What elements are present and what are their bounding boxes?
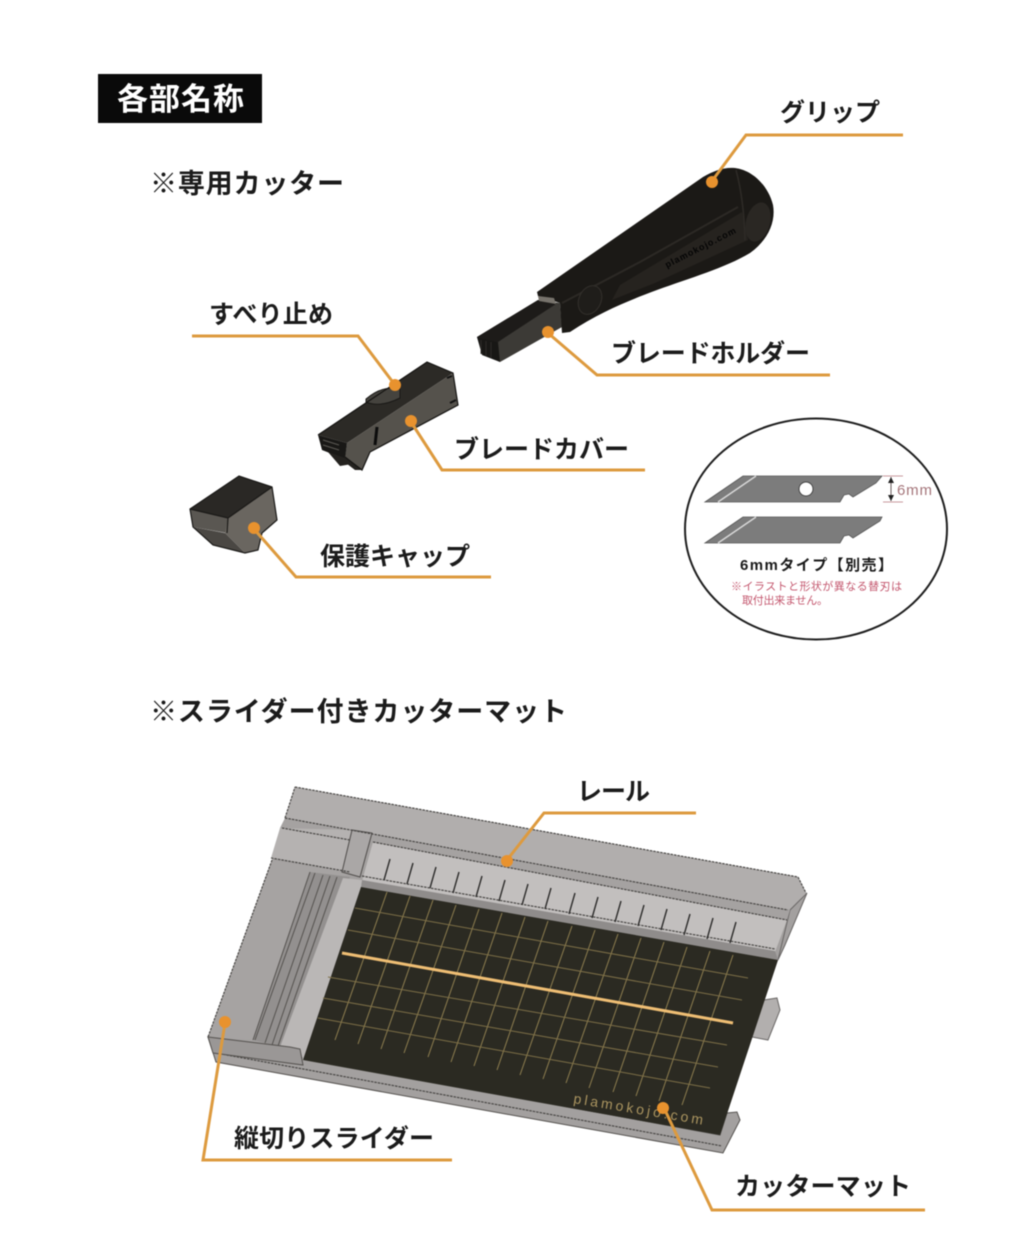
rail: right edge xyxy=(778,893,807,960)
title: parts names: 各部名称 xyxy=(117,82,244,117)
label: grip: グリップ xyxy=(780,98,880,127)
orange cutting guide line xyxy=(342,953,733,1023)
block at upper left xyxy=(271,828,352,873)
ruler strip xyxy=(362,842,787,952)
icon: upper blade xyxy=(705,476,882,502)
icon: knife handle and blade holder xyxy=(477,168,775,362)
groove band under rail xyxy=(280,818,790,920)
title: parts names xyxy=(98,74,262,123)
leader: vertical cut slider xyxy=(203,1016,452,1160)
leader: blade cover xyxy=(405,415,645,470)
panel: replacement blade callout xyxy=(685,418,947,640)
label: protective cap: 保護キャップ xyxy=(320,543,470,571)
icon: blade cover xyxy=(318,362,458,470)
label: blade cover: ブレードカバー xyxy=(454,435,629,464)
heading: cutter mat with slider: ※スライダー付きカッターマット xyxy=(150,696,567,727)
label: vertical cut slider: 縦切りスライダー xyxy=(234,1124,434,1153)
slider grooves xyxy=(253,872,350,1047)
icon: protective cap xyxy=(190,476,277,553)
leader: protective cap xyxy=(248,522,491,577)
leader: blade holder xyxy=(542,326,830,375)
label: 6mm type sold separately: 6mmタイプ【別売】 xyxy=(740,557,893,574)
rail: top face xyxy=(285,787,806,910)
label: cutter mat: カッターマット xyxy=(735,1173,911,1201)
icon: lower blade xyxy=(705,517,882,543)
heading: dedicated cutter: ※専用カッター xyxy=(150,169,344,199)
base: under fill xyxy=(208,818,790,1135)
slider front edge xyxy=(208,1037,303,1065)
dimension: 6mm xyxy=(883,476,932,502)
mat logo: plamokojo.com xyxy=(573,1090,704,1128)
note: incompatible blades: 取付出来ません。 xyxy=(742,594,828,607)
dimension: 6mm: 6mm xyxy=(897,482,932,499)
mat grid xyxy=(318,892,748,1105)
dark cutting mat xyxy=(303,887,778,1135)
panel: cutter mat with slider illustration xyxy=(208,787,807,1153)
lip above mat xyxy=(361,880,778,960)
label: anti-slip: すべり止め xyxy=(209,301,333,329)
base: bottom rail xyxy=(208,1037,740,1153)
leader: cutter mat xyxy=(657,1102,925,1210)
slider flat area xyxy=(208,860,350,1050)
icon: knife handle and blade holder: plamokojo.com xyxy=(663,225,737,270)
label: rail: レール xyxy=(577,778,650,806)
label: blade holder: ブレードホルダー xyxy=(611,339,810,368)
leader: grip xyxy=(706,135,903,188)
vertical slider bar xyxy=(342,830,372,877)
leader: anti-slip xyxy=(192,336,401,391)
ruler ticks xyxy=(384,859,736,943)
dark edge lines xyxy=(208,787,806,1037)
slider light strip xyxy=(280,878,362,1060)
note: incompatible blades xyxy=(731,579,902,607)
tab: right side xyxy=(752,998,780,1040)
note: incompatible blades: ※イラストと形状が異なる替刃は xyxy=(731,579,902,593)
leader: rail xyxy=(501,813,696,867)
